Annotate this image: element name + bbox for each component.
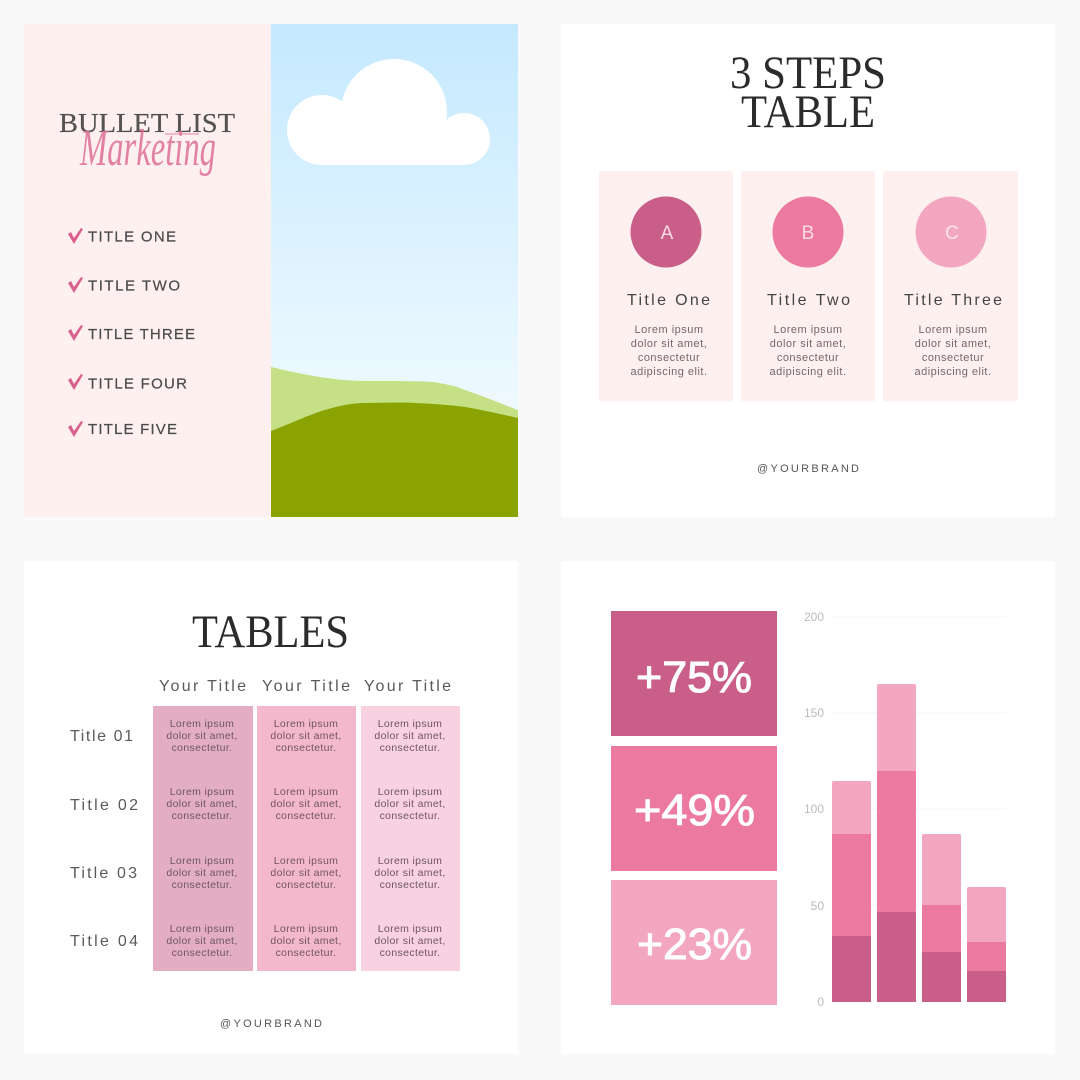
table column 3: dolor sit amet, <box>374 935 446 947</box>
step B: B <box>802 223 814 244</box>
hills <box>271 367 518 517</box>
cloud <box>287 59 490 165</box>
table column 2: Lorem ipsum <box>274 718 338 730</box>
checklist: TITLE FIVE <box>88 421 177 438</box>
table column 1: consectetur. <box>172 810 232 822</box>
table column 3: Lorem ipsum <box>378 786 442 798</box>
table column 3: Lorem ipsum <box>378 923 442 935</box>
table column 2: Lorem ipsum <box>274 923 338 935</box>
bar 1 <box>832 781 871 1002</box>
step A: dolor sit amet, <box>631 338 707 350</box>
panel: bullet list <box>24 24 518 517</box>
bar 2 <box>877 684 916 1002</box>
checklist: TITLE ONE <box>88 228 176 246</box>
step B: Title Two <box>767 292 850 309</box>
table column 1: dolor sit amet, <box>166 798 238 810</box>
y axis labels <box>804 610 824 1009</box>
table column 3: Lorem ipsum <box>378 855 442 867</box>
brand: @YOURBRAND <box>757 463 859 475</box>
column headers: Your Title <box>262 678 350 695</box>
checklist: TITLE FOUR <box>88 376 187 392</box>
table column 1: dolor sit amet, <box>166 935 238 947</box>
table column 2: consectetur. <box>276 947 336 959</box>
table column 3: consectetur. <box>380 947 440 959</box>
table column 1: dolor sit amet, <box>166 730 238 742</box>
stat +23%: +23% <box>637 920 752 969</box>
table column 3: dolor sit amet, <box>374 867 446 879</box>
brand: @YOURBRAND <box>220 1018 322 1030</box>
step C: Lorem ipsum <box>918 324 988 336</box>
stat +49% <box>611 746 777 871</box>
stat +23% <box>611 880 777 1005</box>
stacked bar chart <box>804 610 1006 1009</box>
y axis labels: 150 <box>804 706 824 720</box>
checklist: TITLE THREE <box>88 326 195 343</box>
landscape illustration <box>271 24 518 517</box>
script subtitle <box>79 120 216 177</box>
column headers <box>159 678 451 695</box>
stat +75% <box>611 611 777 736</box>
heading: BULLET LIST <box>59 108 236 138</box>
y axis labels: 100 <box>804 802 824 816</box>
step A: adipiscing elit. <box>630 366 708 378</box>
step B: adipiscing elit. <box>769 366 847 378</box>
panel: 3 steps table <box>561 24 1055 517</box>
step C <box>883 171 1018 401</box>
table column 3 <box>361 706 460 971</box>
y axis labels: 0 <box>817 995 824 1009</box>
row labels: Title 02 <box>70 797 138 814</box>
table column 2: dolor sit amet, <box>270 730 342 742</box>
table column 1 <box>153 706 253 971</box>
table column 2: Lorem ipsum <box>274 786 338 798</box>
step B: dolor sit amet, <box>770 338 846 350</box>
step A: Lorem ipsum <box>634 324 704 336</box>
heading: TABLE <box>741 86 875 138</box>
column headers: Your Title <box>364 678 451 695</box>
table column 3: dolor sit amet, <box>374 730 446 742</box>
checklist: TITLE TWO <box>88 278 180 294</box>
step A: consectetur <box>638 352 700 364</box>
table column 2: dolor sit amet, <box>270 935 342 947</box>
step B: consectetur <box>777 352 839 364</box>
step C: C <box>945 223 959 244</box>
step C: dolor sit amet, <box>915 338 991 350</box>
table column 3: dolor sit amet, <box>374 798 446 810</box>
heading: TABLES <box>192 606 349 658</box>
step B: Lorem ipsum <box>773 324 843 336</box>
heading <box>59 108 236 177</box>
bar 4 <box>967 887 1006 1002</box>
y axis labels: 200 <box>804 610 824 624</box>
step A <box>599 171 733 401</box>
table column 1: consectetur. <box>172 879 232 891</box>
step C: adipiscing elit. <box>914 366 992 378</box>
row labels: Title 04 <box>70 933 138 950</box>
column headers: Your Title <box>159 678 246 695</box>
table column 2: consectetur. <box>276 810 336 822</box>
stat +75%: +75% <box>636 653 752 702</box>
table column 2: consectetur. <box>276 879 336 891</box>
table column 3: Lorem ipsum <box>378 718 442 730</box>
heading: 3 STEPS <box>730 47 886 99</box>
step C: Title Three <box>904 292 1002 309</box>
table column 1: Lorem ipsum <box>170 923 234 935</box>
table column 3: consectetur. <box>380 879 440 891</box>
panel: tables <box>24 561 518 1054</box>
table column 3: consectetur. <box>380 810 440 822</box>
table column 2: dolor sit amet, <box>270 867 342 879</box>
table column 1: Lorem ipsum <box>170 786 234 798</box>
bar 3 <box>922 834 961 1002</box>
table column 3: consectetur. <box>380 742 440 754</box>
table column 2: consectetur. <box>276 742 336 754</box>
row labels: Title 01 <box>70 728 133 745</box>
table column 2: dolor sit amet, <box>270 798 342 810</box>
y axis labels: 50 <box>811 899 824 913</box>
table column 1: consectetur. <box>172 742 232 754</box>
table column 2: Lorem ipsum <box>274 855 338 867</box>
row labels: Title 03 <box>70 865 137 882</box>
stat +49%: +49% <box>634 786 755 835</box>
step A: Title One <box>627 292 710 309</box>
table column 1: consectetur. <box>172 947 232 959</box>
step A: A <box>661 223 674 244</box>
row labels <box>70 728 138 950</box>
table column 1: dolor sit amet, <box>166 867 238 879</box>
checklist <box>68 228 195 438</box>
panel: statistics <box>561 561 1055 1054</box>
step B <box>741 171 875 401</box>
step C: consectetur <box>922 352 984 364</box>
heading <box>730 47 886 138</box>
table column 1: Lorem ipsum <box>170 718 234 730</box>
script subtitle: Marketing <box>79 120 216 177</box>
table column 2 <box>257 706 356 971</box>
table column 1: Lorem ipsum <box>170 855 234 867</box>
